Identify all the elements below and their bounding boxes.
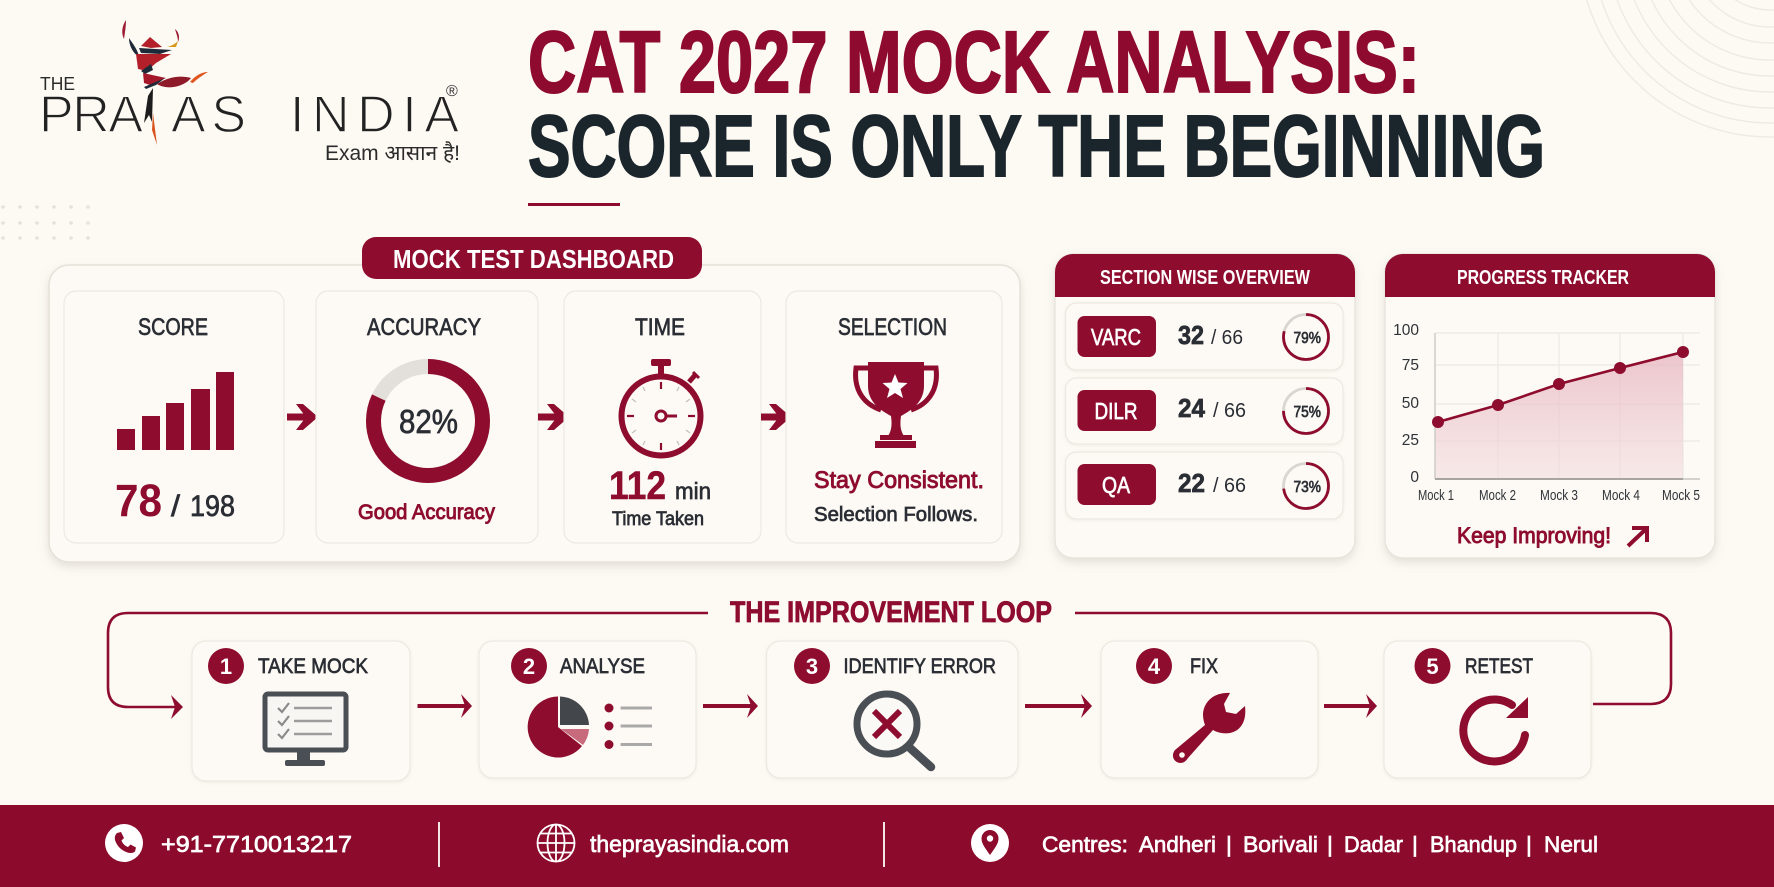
icon: up-right arrow bbox=[1628, 528, 1647, 546]
step label: RETEST bbox=[1465, 655, 1533, 678]
time label: TIME bbox=[635, 314, 685, 341]
VARC score: 32 bbox=[1178, 320, 1204, 350]
logo INDIA: INDIA bbox=[290, 86, 459, 144]
arrow bbox=[538, 404, 569, 430]
step number 1: 1 bbox=[220, 654, 232, 679]
step 5: retest bbox=[1384, 641, 1591, 778]
logo tagline: Exam आसान है! bbox=[325, 141, 460, 165]
bar icon bbox=[117, 372, 234, 450]
divider bbox=[438, 822, 440, 867]
time value: min bbox=[675, 478, 711, 504]
icon: location pin bbox=[971, 824, 1009, 862]
arrow bbox=[418, 694, 472, 718]
phone contact bbox=[105, 824, 352, 862]
centres bbox=[971, 824, 1598, 862]
x axis labels: Mock 5 bbox=[1662, 487, 1700, 504]
QA badge bbox=[1078, 464, 1156, 505]
logo THE: THE bbox=[40, 74, 75, 94]
centre list: | bbox=[1412, 832, 1418, 857]
QA ring 73% bbox=[1284, 464, 1328, 508]
time value: 112 bbox=[609, 464, 666, 508]
line chart bbox=[1393, 322, 1700, 504]
centre list: Bhandup bbox=[1430, 832, 1517, 857]
progress header bbox=[1385, 254, 1715, 297]
score value: 198 bbox=[190, 490, 235, 523]
logo registered mark: ® bbox=[446, 83, 458, 100]
dashboard heading: MOCK TEST DASHBOARD bbox=[393, 244, 674, 274]
donut chart 82%: 82% bbox=[399, 403, 458, 440]
arrow bbox=[703, 694, 758, 718]
icon: magnifier with cross bbox=[857, 694, 931, 767]
panel: section wise overview bbox=[1055, 254, 1355, 558]
VARC ring 79%: 79% bbox=[1294, 330, 1321, 347]
step number 5 bbox=[1414, 648, 1450, 684]
row: QA bbox=[1066, 452, 1343, 519]
VARC badge bbox=[1078, 316, 1156, 357]
DILR badge bbox=[1078, 390, 1156, 431]
logo: The Prayas India bbox=[39, 20, 460, 165]
icon: pie chart and legend bbox=[528, 696, 652, 757]
dashboard heading bbox=[362, 237, 702, 279]
time caption: Time Taken bbox=[612, 509, 704, 530]
keep improving note: Keep Improving! bbox=[1457, 523, 1611, 548]
centre list: Centres: bbox=[1042, 832, 1128, 857]
VARC badge: VARC bbox=[1091, 324, 1141, 350]
step number 3: 3 bbox=[806, 654, 818, 679]
step number 2 bbox=[511, 648, 547, 684]
score value: / bbox=[171, 490, 181, 523]
score value: 78 bbox=[115, 475, 162, 526]
step number 3 bbox=[794, 648, 830, 684]
DILR ring 75% bbox=[1284, 388, 1328, 434]
stopwatch icon bbox=[622, 359, 700, 456]
selection slogan line 1: Stay Consistent. bbox=[814, 467, 984, 494]
card: accuracy bbox=[316, 291, 538, 543]
loop return line left bbox=[108, 613, 708, 719]
icon: phone bbox=[105, 824, 143, 862]
logo AS: AS bbox=[171, 86, 246, 144]
centre list: Nerul bbox=[1544, 832, 1598, 857]
arrow bbox=[287, 404, 318, 430]
step 2: analyse bbox=[479, 641, 696, 778]
centre list: Borivali bbox=[1243, 832, 1318, 857]
title underline bbox=[528, 203, 620, 206]
QA score: 22 bbox=[1178, 468, 1205, 498]
loop heading: THE IMPROVEMENT LOOP bbox=[730, 596, 1052, 629]
title line 1: CAT 2027 MOCK ANALYSIS: bbox=[528, 14, 1420, 111]
loop return line right bbox=[1075, 613, 1671, 704]
website bbox=[538, 824, 789, 862]
time value bbox=[609, 464, 711, 508]
accuracy caption: Good Accuracy bbox=[358, 501, 495, 524]
section header bbox=[1055, 254, 1355, 297]
panel: mock test dashboard bbox=[49, 237, 1020, 562]
card: time bbox=[564, 291, 761, 543]
centre list bbox=[1042, 832, 1598, 857]
step number 5: 5 bbox=[1426, 654, 1439, 679]
row: VARC bbox=[1066, 303, 1343, 370]
centre list: | bbox=[1327, 832, 1333, 857]
selection slogan line 2: Selection Follows. bbox=[814, 503, 978, 526]
title bbox=[528, 14, 1545, 195]
score value bbox=[115, 475, 235, 526]
y axis labels: 50 bbox=[1402, 395, 1419, 412]
selection label: SELECTION bbox=[838, 314, 947, 341]
step 1: take mock bbox=[192, 641, 410, 781]
step number 4: 4 bbox=[1148, 654, 1161, 679]
centre list: | bbox=[1226, 832, 1232, 857]
icon: globe bbox=[538, 824, 574, 862]
DILR score: 24 bbox=[1178, 393, 1206, 423]
card: score bbox=[64, 291, 284, 543]
score label: SCORE bbox=[138, 314, 208, 341]
panel: progress tracker bbox=[1385, 254, 1715, 558]
step label: IDENTIFY ERROR bbox=[844, 655, 996, 678]
phone number: +91-7710013217 bbox=[161, 831, 352, 857]
x axis labels: Mock 1 bbox=[1418, 487, 1454, 504]
logo dancer figure bbox=[122, 20, 208, 145]
QA score: / 66 bbox=[1213, 475, 1246, 497]
donut chart 82% bbox=[374, 366, 482, 476]
step number 4 bbox=[1136, 648, 1172, 684]
DILR badge: DILR bbox=[1094, 398, 1138, 424]
row: DILR bbox=[1066, 378, 1343, 444]
VARC score bbox=[1178, 320, 1243, 350]
QA ring 73%: 73% bbox=[1294, 479, 1321, 496]
step label: ANALYSE bbox=[560, 655, 645, 678]
divider bbox=[883, 822, 885, 867]
footer bar bbox=[0, 805, 1774, 887]
y axis labels: 75 bbox=[1402, 357, 1419, 374]
x axis labels bbox=[1418, 487, 1700, 504]
centre list: | bbox=[1526, 832, 1532, 857]
section header: SECTION WISE OVERVIEW bbox=[1100, 266, 1311, 289]
x axis labels: Mock 3 bbox=[1540, 487, 1578, 504]
y axis labels: 100 bbox=[1393, 322, 1419, 339]
improvement loop bbox=[108, 596, 1671, 781]
y axis labels: 25 bbox=[1402, 432, 1419, 449]
centre list: Andheri bbox=[1139, 832, 1216, 857]
centre list: Dadar bbox=[1344, 832, 1403, 857]
x axis labels: Mock 2 bbox=[1479, 487, 1516, 504]
QA score bbox=[1178, 468, 1246, 498]
trophy icon bbox=[856, 362, 936, 448]
x axis labels: Mock 4 bbox=[1602, 487, 1640, 504]
step 3: identify error bbox=[766, 641, 1018, 778]
arrow bbox=[761, 404, 791, 430]
VARC ring 79% bbox=[1284, 314, 1328, 360]
QA badge: QA bbox=[1102, 472, 1131, 498]
VARC score: / 66 bbox=[1211, 327, 1243, 349]
step number 2: 2 bbox=[523, 654, 535, 679]
logo PRA: PRA bbox=[39, 86, 143, 144]
arrow bbox=[1025, 694, 1092, 718]
y axis labels: 0 bbox=[1410, 469, 1419, 486]
DILR score: / 66 bbox=[1213, 400, 1246, 422]
card: selection bbox=[786, 291, 1002, 543]
step number 1 bbox=[208, 648, 244, 684]
website address: theprayasindia.com bbox=[590, 831, 789, 857]
icon: monitor with checklist bbox=[265, 694, 346, 766]
arrow bbox=[1324, 694, 1377, 718]
progress header: PROGRESS TRACKER bbox=[1457, 266, 1629, 289]
DILR ring 75%: 75% bbox=[1294, 404, 1321, 421]
icon: retry arrow bbox=[1463, 697, 1528, 761]
accuracy label: ACCURACY bbox=[367, 314, 481, 341]
y axis labels bbox=[1393, 322, 1419, 486]
step label: TAKE MOCK bbox=[258, 655, 368, 678]
step label: FIX bbox=[1190, 655, 1218, 678]
icon: wrench bbox=[1173, 693, 1245, 763]
step 4: fix bbox=[1101, 641, 1318, 778]
DILR score bbox=[1178, 393, 1246, 423]
